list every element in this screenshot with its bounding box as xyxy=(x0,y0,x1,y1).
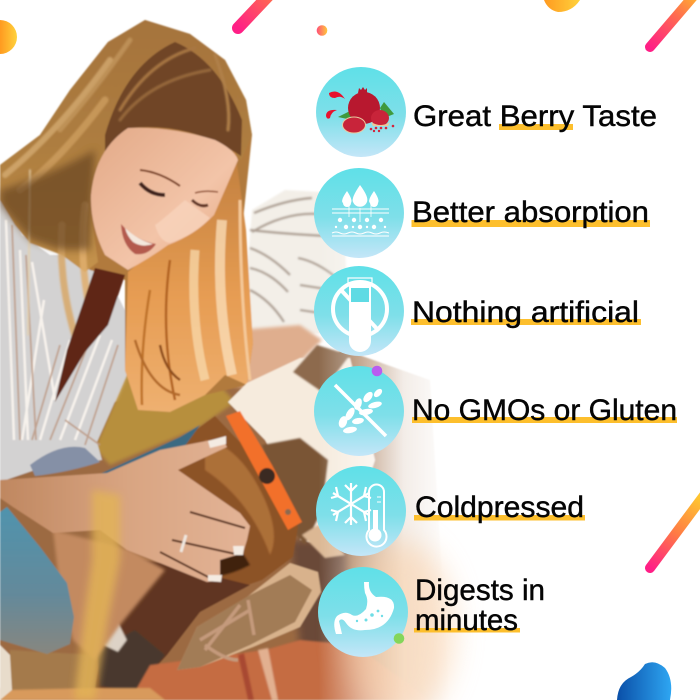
arm and hand xyxy=(0,436,250,582)
dog muzzle and body xyxy=(95,555,250,692)
icon: snowflake and thermometer xyxy=(331,483,387,547)
right fade overlay xyxy=(318,0,700,700)
label second line: minutes xyxy=(415,604,518,637)
badge circle xyxy=(316,67,406,157)
wheat field background xyxy=(95,370,235,465)
underline xyxy=(412,417,677,423)
badge circle xyxy=(318,567,408,657)
dog head fur xyxy=(165,416,298,600)
neckline xyxy=(55,268,125,402)
jeans behind the hand xyxy=(100,425,200,476)
feature: nothing artificial xyxy=(314,266,641,356)
feature: better absorption xyxy=(314,168,650,258)
hair lower right xyxy=(125,150,253,412)
icon: stomach xyxy=(334,582,394,634)
icon: absorption xyxy=(332,185,389,236)
label: Nothing artificial xyxy=(412,296,639,329)
eyes and brows xyxy=(140,170,180,186)
head silhouette underlay xyxy=(0,20,253,412)
man's forearm xyxy=(205,325,322,388)
feature: digests in minutes xyxy=(318,567,545,657)
hair main xyxy=(0,20,252,345)
underline xyxy=(412,220,650,227)
underline xyxy=(411,319,641,325)
orange collar xyxy=(226,411,302,530)
face xyxy=(91,128,238,270)
decoration: top right stroke xyxy=(650,0,697,47)
sole of other shoe xyxy=(0,645,12,700)
decoration: purple dot xyxy=(372,366,382,376)
shirt xyxy=(0,195,130,482)
decoration: small gradient dot xyxy=(317,25,327,36)
label: No GMOs or Gluten xyxy=(412,394,677,427)
warm photo ground xyxy=(0,350,450,700)
feature: no gmos or gluten xyxy=(314,366,677,456)
underline xyxy=(414,628,520,632)
decoration: top yellow blob xyxy=(544,0,580,12)
badge circle xyxy=(314,366,404,456)
icon: test tube with prohibition sign xyxy=(333,278,387,352)
sneaker xyxy=(177,563,321,670)
badge circle xyxy=(314,266,404,356)
feature: coldpressed xyxy=(316,466,585,556)
underline xyxy=(414,515,585,520)
label: Digests in xyxy=(415,574,545,607)
dark ground under shoe xyxy=(290,540,355,650)
badge circle xyxy=(316,466,406,556)
feature: great berry taste xyxy=(316,67,657,157)
underline xyxy=(499,124,573,130)
decoration: right middle stroke xyxy=(650,490,700,568)
dog white neck and shoulder xyxy=(228,358,375,550)
blurred wheat stalk xyxy=(74,490,120,700)
decoration: top pink stroke xyxy=(238,0,272,28)
man in striped shirt xyxy=(248,190,350,335)
decoration: blue blob xyxy=(617,662,671,700)
icon: pomegranate xyxy=(326,87,394,133)
dog brown patches xyxy=(262,345,350,558)
smile xyxy=(121,224,156,254)
jeans xyxy=(0,507,74,654)
badge circle xyxy=(314,168,404,258)
label: Great Berry Taste xyxy=(413,100,657,133)
folded leg xyxy=(53,530,165,660)
blanket xyxy=(0,640,430,700)
warm glow at lower fade xyxy=(345,540,455,700)
decoration: green dot xyxy=(394,633,404,644)
photo: woman petting a dog xyxy=(0,20,450,700)
icon: crossed wheat xyxy=(335,385,386,436)
decoration: left half circle xyxy=(0,20,17,54)
label: Better absorption xyxy=(412,196,649,229)
label: Coldpressed xyxy=(415,491,584,524)
